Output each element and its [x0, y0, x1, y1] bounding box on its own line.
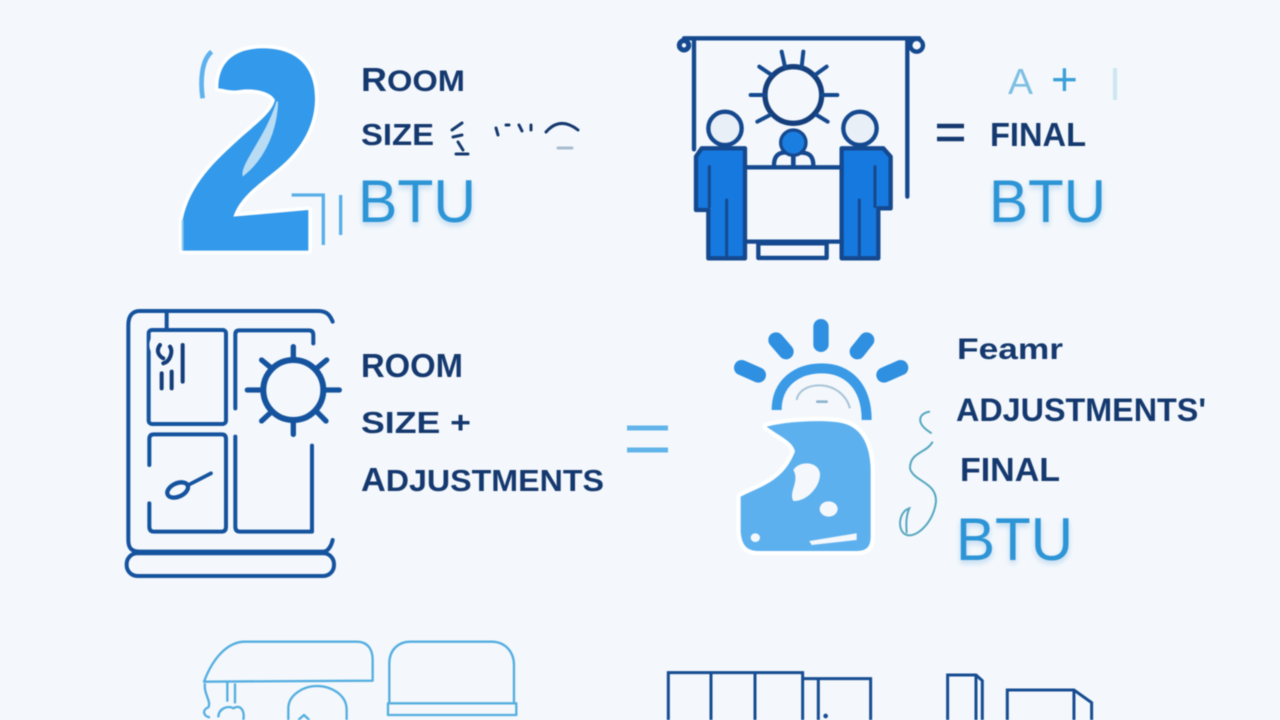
text: size plus: SIZE + — [361, 405, 471, 440]
small figure — [149, 332, 171, 358]
panel: room size plus adjustments — [127, 311, 668, 576]
text: adjustments: ADJUSTMENTS' — [956, 392, 1206, 428]
icon: air conditioner unit — [204, 642, 373, 682]
text: BTU: BTU — [956, 506, 1073, 573]
text: faded formula: A — [1008, 61, 1033, 102]
text: final: FINAL — [960, 451, 1060, 488]
icon: presentation with sun and people — [679, 38, 923, 258]
icon: door — [803, 679, 871, 720]
equals sign — [937, 126, 964, 139]
left person — [696, 112, 745, 258]
panel: team adjustments to final BTU — [741, 327, 1206, 573]
rays — [742, 327, 901, 375]
highlights — [792, 463, 820, 501]
panel: team plus final BTU — [679, 38, 1117, 258]
text: faded team label: Feamr — [957, 333, 1063, 366]
icon: lit padlock shape — [741, 327, 936, 551]
text: faded formula: + — [1051, 53, 1078, 105]
right person — [842, 112, 891, 258]
icon: tall box — [948, 675, 982, 720]
equals sign — [627, 428, 668, 450]
centre person — [774, 130, 813, 165]
sun — [263, 360, 323, 420]
arc — [777, 368, 867, 420]
icon: wardrobe — [668, 673, 803, 720]
panel: room size to BTU — [183, 48, 578, 251]
icon: floor plan with sun — [127, 311, 339, 576]
icon: wide box — [1007, 690, 1092, 720]
squiggle — [900, 412, 936, 535]
icon: large number 2 — [183, 48, 341, 251]
key-like tool — [165, 479, 190, 501]
body — [741, 421, 871, 551]
text: size: SIZE — [361, 117, 434, 152]
text: faded formula — [1008, 53, 1117, 105]
presentation board — [684, 38, 919, 197]
icon: dome unit — [389, 642, 514, 703]
text: BTU: BTU — [989, 168, 1106, 235]
text: BTU: BTU — [358, 168, 476, 235]
panel: cropped bottom left icons — [204, 642, 516, 720]
table — [745, 167, 842, 242]
garbled marks after size — [452, 123, 578, 154]
sun — [751, 52, 837, 123]
text: final: FINAL — [990, 116, 1086, 153]
text: room: ROOM — [361, 347, 463, 384]
text: room: ROOM — [361, 61, 465, 98]
text: adjustments: ADJUSTMENTS — [361, 461, 604, 498]
panel: cropped bottom right icons — [668, 673, 1092, 720]
